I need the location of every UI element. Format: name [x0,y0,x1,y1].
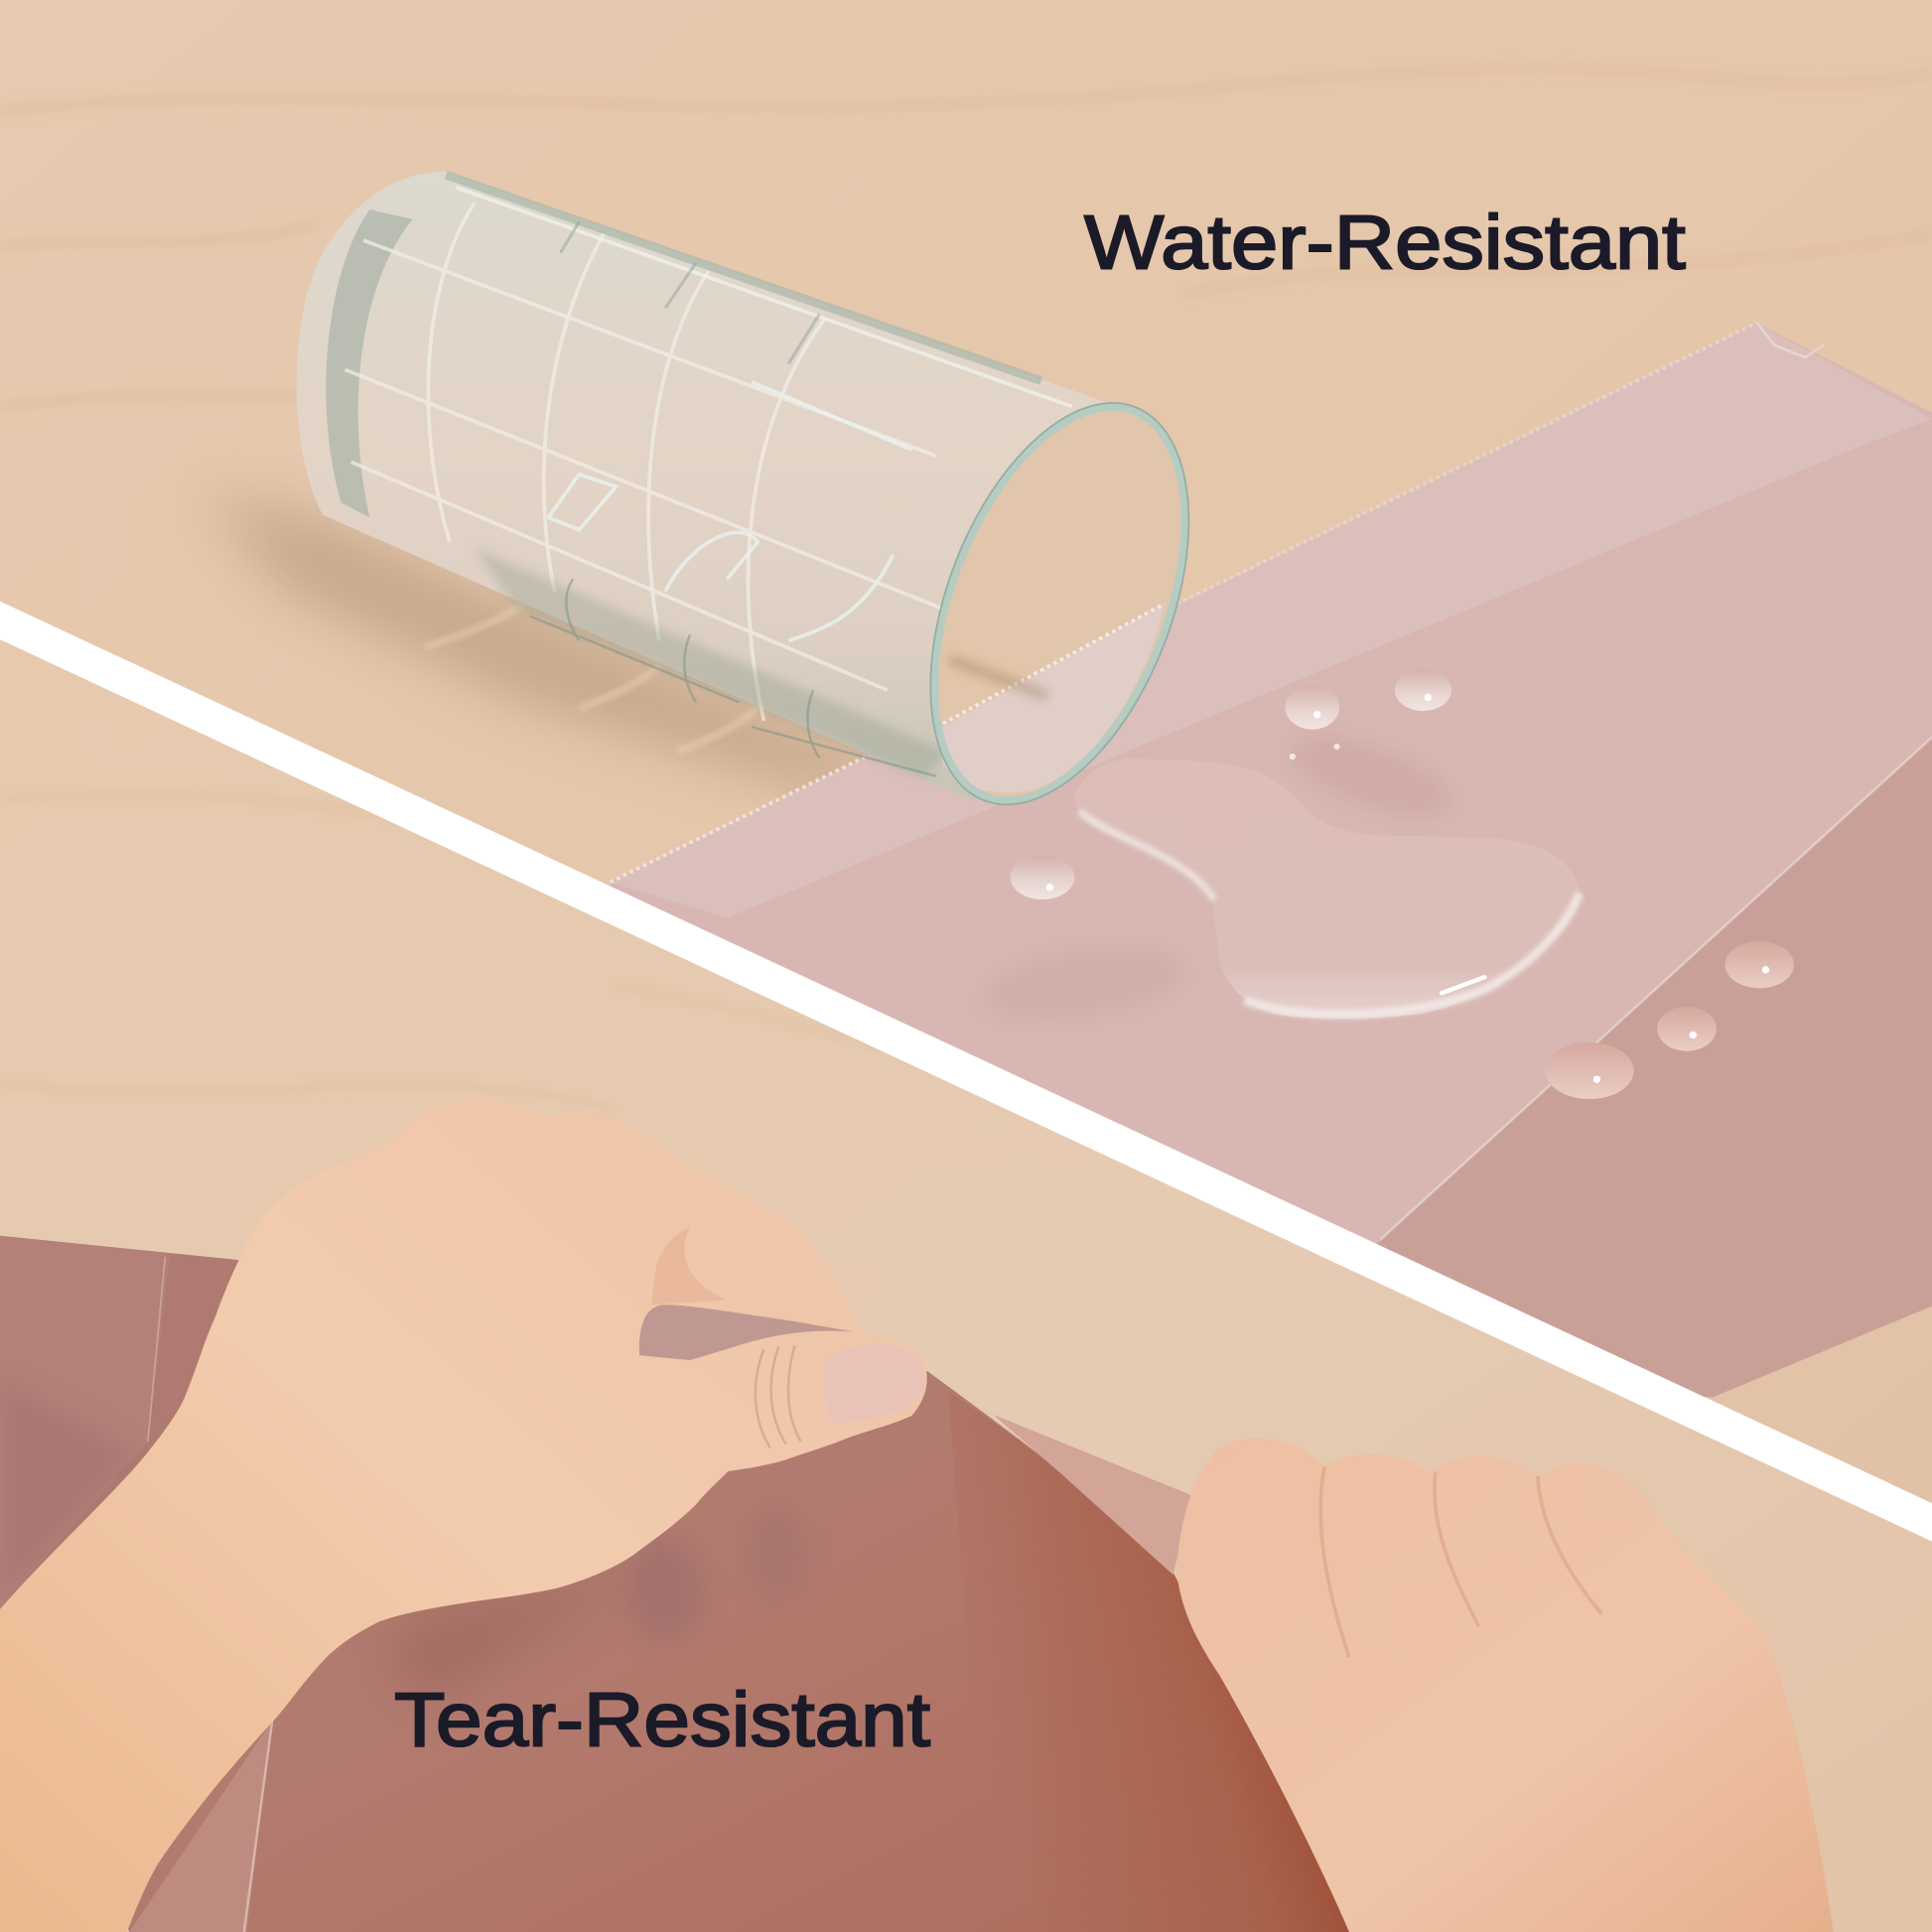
photo: water-resistant scene [222,171,1932,1398]
water puddle [1076,805,1585,1021]
glass tumbler [296,171,1189,806]
finger fold shadow [652,1227,727,1305]
knuckle creases [756,1345,801,1448]
diagonal white divider [0,602,1932,1542]
folder being pulled [0,1236,1355,1932]
glass shadow on table [220,490,869,798]
left hand [0,1098,927,1932]
right hand [1176,1439,1834,1932]
thumb nail [823,1344,925,1425]
lower dark ribs [475,548,949,778]
refracted patterns [548,382,911,640]
water droplets [1011,669,1794,1099]
photo: tear-resistant scene [0,1033,1834,1932]
shadow blotches under clear pocket [1301,741,1441,811]
folder with clear pocket [610,323,1932,1397]
inside of glass opening [938,411,1169,796]
label: tear-resistant: Tear-Resistant [394,1678,930,1763]
finger shadows through folder [629,1543,701,1636]
rim [929,403,1189,805]
folder visible between finger and thumb [639,1305,855,1360]
light caustics in shadow [425,604,758,752]
peeled flap edge [993,1415,1192,1575]
band near base [326,209,413,517]
grid ribs [345,204,961,721]
label: water-resistant: Water-Resistant [1084,201,1686,286]
upper edge highlight [446,175,1041,380]
